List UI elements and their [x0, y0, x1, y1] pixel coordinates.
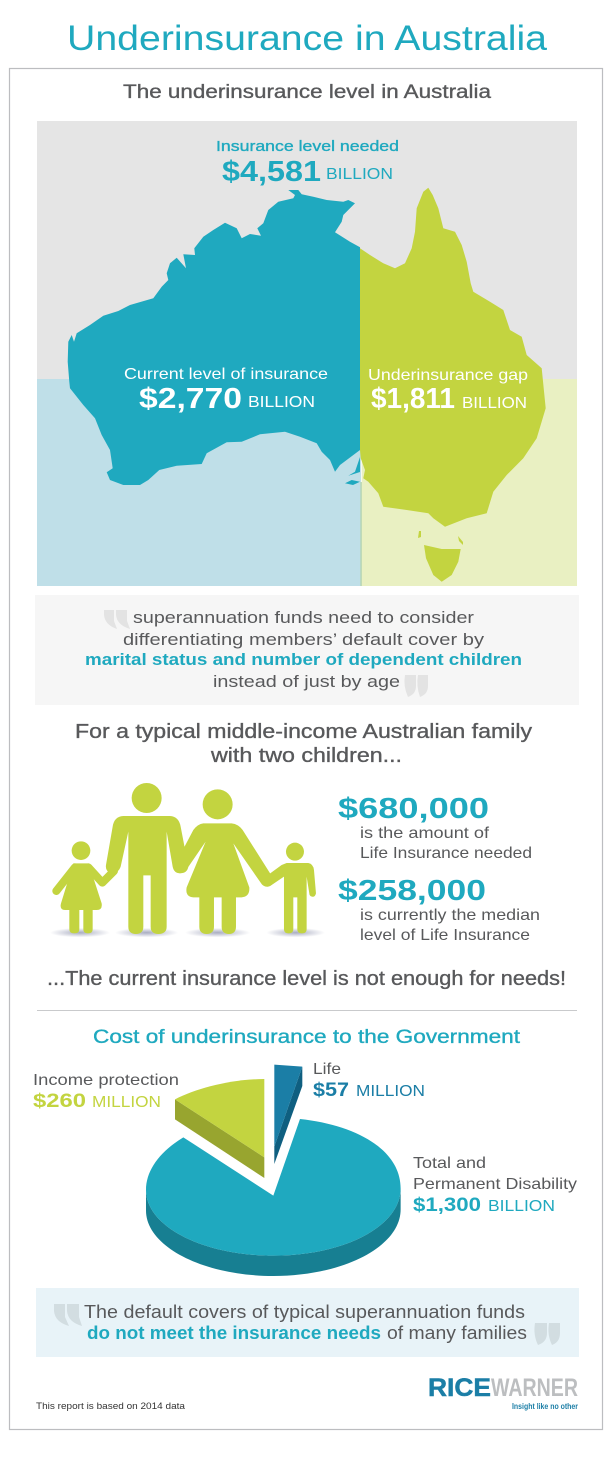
logo: Rice Warner [428, 1374, 578, 1411]
slice: life [274, 1065, 302, 1164]
slice: income protection [175, 1079, 264, 1178]
quote text [84, 1302, 527, 1343]
label: total and permanent disability: BILLION [488, 1198, 555, 1215]
quote text: superannuation funds need to consider [133, 608, 474, 627]
panel: quote superannuation [35, 595, 579, 705]
slice: total and permanent disability [146, 1119, 401, 1276]
label: total and permanent disability: $1,300 [413, 1195, 481, 1216]
stat: life insurance needed: is the amount of [360, 825, 490, 842]
stat: life insurance needed [338, 793, 532, 862]
icon: opening quote [104, 610, 130, 629]
label: life: Life [313, 1061, 341, 1078]
label: insurance level needed: $4,581 [222, 156, 321, 188]
panel: quote default covers [36, 1288, 579, 1357]
label: insurance level needed: Insurance level needed [216, 138, 399, 155]
quote text [85, 608, 522, 691]
quote text: instead of just by age [213, 672, 400, 691]
label: current level of insurance: BILLION [248, 394, 315, 411]
quote text: The default covers of typical superannuation funds [84, 1302, 525, 1322]
stat: median life insurance [338, 875, 540, 944]
logo: Rice Warner: WARNER [491, 1374, 578, 1402]
footer note: This report is based on 2014 data [36, 1401, 186, 1412]
label: current level of insurance [124, 366, 328, 415]
quote text: do not meet the insurance needs [87, 1323, 381, 1343]
label: insurance level needed [216, 138, 399, 188]
label: total and permanent disability: Total and [413, 1155, 486, 1172]
conclusion text: ...The current insurance level is not enough for needs! [47, 968, 566, 990]
label: total and permanent disability: Permanent Disability [413, 1176, 577, 1193]
label: underinsurance gap: Underinsurance gap [368, 367, 528, 384]
label: income protection: MILLION [92, 1094, 161, 1111]
heading: typical family [75, 721, 532, 767]
map: underinsurance gap portion [360, 188, 546, 582]
stat: life insurance needed: $680,000 [338, 793, 489, 825]
stat: median life insurance: level of Life Insurance [360, 927, 530, 944]
map: current level portion [68, 190, 360, 485]
icon: family of four [50, 783, 325, 937]
heading: underinsurance level: The underinsurance level in Australia [123, 82, 492, 103]
label: income protection [33, 1072, 179, 1112]
label: income protection: Income protection [33, 1072, 179, 1089]
stat: median life insurance: $258,000 [338, 875, 486, 907]
logo: Rice Warner: RICE [428, 1374, 491, 1402]
label: life: MILLION [356, 1083, 425, 1100]
chart: 3D pie [146, 1065, 401, 1276]
icon: closing quote [404, 675, 428, 697]
icon: closing quote [534, 1323, 560, 1345]
quote text: marital status and number of dependent children [85, 650, 522, 669]
heading: typical family: For a typical middle-income Australian family [75, 721, 532, 743]
panel: Australia map [37, 121, 577, 586]
stat: life insurance needed: Life Insurance needed [360, 845, 532, 862]
label: life [313, 1061, 425, 1101]
map background [37, 121, 577, 586]
label: underinsurance gap [368, 367, 528, 415]
label: insurance level needed: BILLION [326, 166, 393, 183]
quote text: differentiating members’ default cover by [123, 630, 485, 649]
label: current level of insurance: $2,770 [139, 383, 242, 415]
label: underinsurance gap: BILLION [462, 395, 527, 412]
icon: opening quote [54, 1304, 82, 1326]
title: Underinsurance in Australia [67, 19, 548, 58]
logo: Rice Warner: Insight like no other [512, 1402, 578, 1411]
label: income protection: $260 [33, 1091, 86, 1112]
label: life: $57 [313, 1080, 349, 1101]
quote text: of many families [387, 1323, 527, 1343]
label: underinsurance gap: $1,811 [371, 383, 455, 415]
stat: median life insurance: is currently the median [360, 907, 540, 924]
heading: cost to government: Cost of underinsurance to the Government [93, 1027, 521, 1048]
label: current level of insurance: Current level of insurance [124, 366, 328, 383]
heading: typical family: with two children... [210, 745, 402, 767]
label: total and permanent disability [413, 1155, 577, 1216]
